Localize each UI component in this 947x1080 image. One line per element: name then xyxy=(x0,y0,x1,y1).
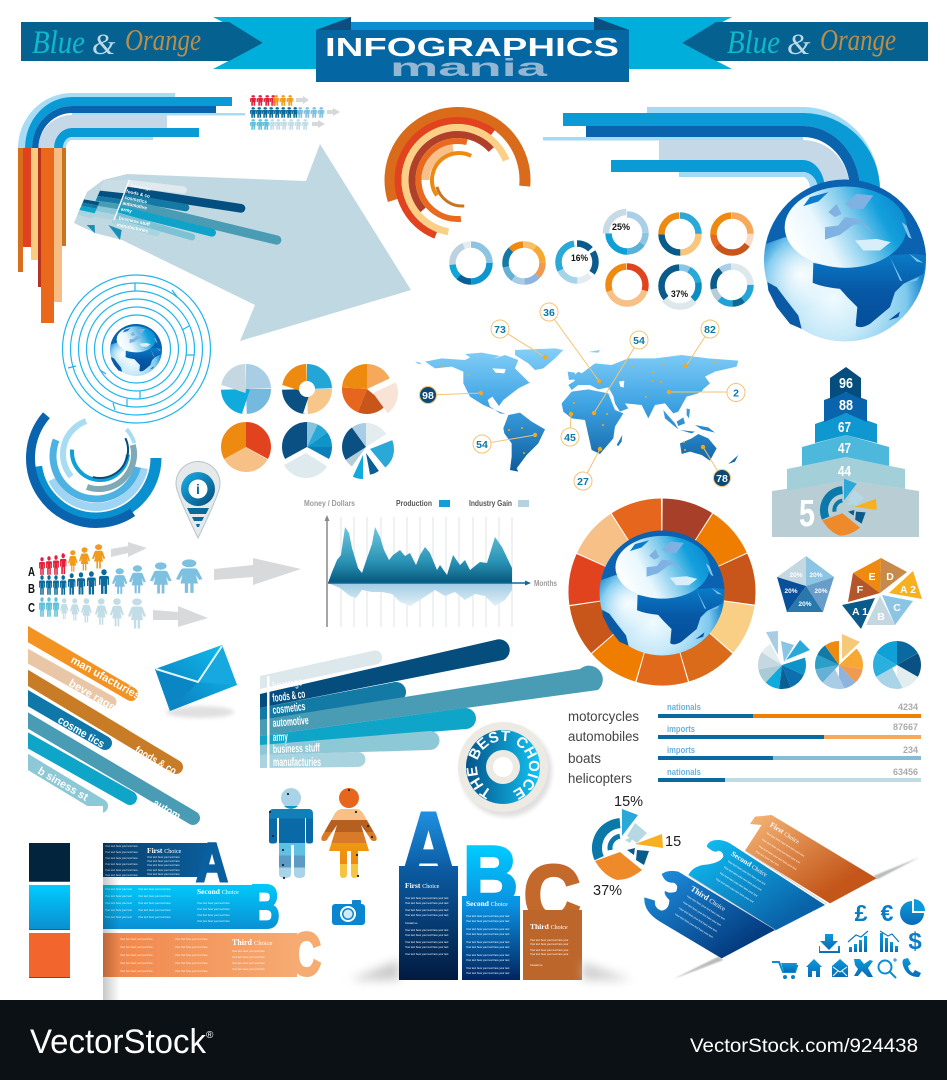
icon: cart xyxy=(772,962,797,979)
envelope icon xyxy=(155,645,237,718)
column B: Your text here your text here your text xyxy=(466,927,510,931)
horizontal tapered bars xyxy=(260,639,603,769)
big pale arrow with perspective bars xyxy=(74,144,411,341)
bar labels: army xyxy=(273,731,288,744)
male figure xyxy=(269,788,313,879)
blue arcs chart xyxy=(5,367,187,549)
column A: Your text here your text here your text xyxy=(405,908,449,912)
column B: Your text here your text here your text xyxy=(466,914,510,918)
banner C: Your text here your text here xyxy=(232,967,265,971)
ribbon 3 xyxy=(644,871,775,958)
orange vertical bars xyxy=(18,148,66,323)
top-left bent stripes xyxy=(18,93,245,323)
ribbon 1: First Choice xyxy=(768,820,802,846)
banner C: Your text here your text here xyxy=(232,961,265,965)
ribbon 1: Your text here your text xyxy=(754,849,780,867)
pie charts grid xyxy=(234,376,386,467)
diagonal bar labels: beve rage xyxy=(66,677,118,714)
diagonal bars xyxy=(28,626,200,825)
axes xyxy=(324,515,531,627)
banner B xyxy=(103,873,280,942)
map callout numbers: 27 xyxy=(577,476,589,488)
progress bar 2 xyxy=(658,722,921,739)
progress bar 3 xyxy=(658,745,921,760)
column A: Contact us xyxy=(405,921,418,925)
central title box: INFOGRAPHICS xyxy=(325,32,619,62)
bar labels: business stuff xyxy=(118,215,151,227)
column A: Your text here your text here your text xyxy=(405,933,449,937)
banner C: Your text here your text here xyxy=(120,961,153,965)
banner B: Your text here your text here xyxy=(138,908,171,912)
exploded pentagon chart: A 2 xyxy=(900,584,916,596)
diagonal bar labels xyxy=(36,654,183,823)
banner A xyxy=(103,831,228,893)
segmented pie with percentages: 15% xyxy=(614,794,643,810)
column C: Your text here your text here your xyxy=(530,942,569,946)
bar labels: beverage xyxy=(130,183,152,192)
column B: B xyxy=(463,830,518,921)
pie 4 xyxy=(234,434,258,460)
colour blocks xyxy=(29,843,70,978)
column A: Your text here your text here your text xyxy=(405,913,449,917)
donut 1 xyxy=(452,244,490,282)
icon: euro: € xyxy=(881,900,894,926)
progress bar 4: 63456 xyxy=(893,767,918,777)
right banner: Blue and Orange: Blue xyxy=(727,25,780,61)
progress bar 3: imports xyxy=(667,745,695,755)
map callout numbers: 78 xyxy=(716,473,728,485)
left banner: Blue and Orange: & xyxy=(92,28,116,61)
ribbon 3: Your text here your text here your text xyxy=(674,912,714,939)
info pin xyxy=(176,461,220,538)
column B: Your text here your text here your text xyxy=(466,953,510,957)
banner A: Your text here your text here xyxy=(105,844,138,848)
row B xyxy=(39,559,202,595)
exploded pentagon chart: E xyxy=(868,571,876,583)
best choice badge: THE BEST CHOICE xyxy=(466,730,540,800)
female figure xyxy=(321,788,377,878)
donut charts xyxy=(452,212,750,306)
banner B: Your text here your text here xyxy=(138,887,171,891)
area chart xyxy=(304,499,557,627)
chart labels: Production xyxy=(396,499,432,508)
ribbon 3: Third Choice xyxy=(689,884,728,913)
banner B: Your text here your text here xyxy=(138,915,171,919)
column B: Your text here your text here your text xyxy=(466,958,510,962)
icon: pie xyxy=(900,899,925,925)
icon: home xyxy=(806,959,822,977)
bar labels xyxy=(272,676,321,769)
bar labels: manufacturies xyxy=(116,222,149,234)
bar labels: manufacturies xyxy=(273,757,321,769)
progress bar 3: 234 xyxy=(903,745,918,755)
bar labels: cosmetics xyxy=(272,701,306,717)
banner B: Your text here your text xyxy=(105,908,132,912)
column A: Your text here your text here your text xyxy=(405,928,449,932)
banner B: Your text here your text here xyxy=(197,901,230,905)
banner B: Your text here your text xyxy=(105,901,132,905)
orange data dots xyxy=(442,355,715,454)
donut 3: 16%: 16% xyxy=(571,253,588,264)
white fold strip xyxy=(70,806,120,1000)
bar labels xyxy=(116,183,152,234)
banner A: A xyxy=(196,831,228,893)
ribbon 2: Second Choice xyxy=(730,849,770,879)
pie 2 xyxy=(294,376,320,402)
banner C: Your text here your text here xyxy=(120,953,153,957)
footer bar: VectorStock xyxy=(30,1023,207,1061)
exploded pentagon chart xyxy=(842,558,922,629)
column A xyxy=(399,793,458,980)
icon: pound: £ xyxy=(855,900,868,926)
banner A: Your text here your text here xyxy=(147,859,180,863)
banner A: Your text here your text here xyxy=(147,872,180,876)
production area xyxy=(328,527,512,583)
pie 3 xyxy=(354,376,386,406)
bottom right pies xyxy=(766,631,909,677)
map callout numbers: 82 xyxy=(704,324,716,336)
icon: rising chart xyxy=(848,931,868,952)
row A xyxy=(39,544,105,575)
map callout numbers: 36 xyxy=(543,307,555,319)
second panel stripes xyxy=(89,180,129,220)
ribbon 1: Your text here your text here your text xyxy=(761,837,801,864)
stepped pyramid xyxy=(772,367,919,537)
map callout numbers: 73 xyxy=(494,324,506,336)
progress bars xyxy=(658,702,921,782)
people pictogram rows xyxy=(28,542,301,629)
left banner: Blue and Orange: Blue xyxy=(32,25,85,61)
banner A: Your text here your text here xyxy=(147,868,180,872)
column C: Your text here your text here your xyxy=(530,938,569,942)
column C: C xyxy=(524,848,580,941)
column B: Your text here your text here your text xyxy=(466,940,510,944)
stepped pyramid: 67 xyxy=(838,419,851,436)
bar labels: automotive xyxy=(122,200,148,211)
ribbon 1 xyxy=(745,815,877,903)
banner B: Your text here your text here xyxy=(138,901,171,905)
donut 4: 25%: 25% xyxy=(612,222,631,233)
row C xyxy=(39,597,146,629)
diagonal bar labels: man ufacturies xyxy=(69,654,143,702)
floor shadows xyxy=(350,960,399,980)
icon: phone xyxy=(902,958,921,977)
map callout numbers xyxy=(420,303,745,490)
pentagon chart: 20% xyxy=(814,588,828,595)
exploded pentagon chart: D xyxy=(886,571,894,583)
grid lines xyxy=(341,517,512,627)
reflected area xyxy=(328,583,512,606)
icon: falling chart xyxy=(880,931,899,952)
stepped pyramid: 96 xyxy=(839,375,853,392)
banner A: Your text here your text here xyxy=(147,863,180,867)
pie B xyxy=(827,634,860,677)
ribbon 3: Your text here your text here your text xyxy=(678,906,718,933)
donut 8: 37%: 37% xyxy=(671,289,688,300)
pentagon chart xyxy=(777,556,834,612)
pie 5 xyxy=(294,434,320,466)
progress bar 1: nationals xyxy=(667,702,701,712)
ribbon 2 xyxy=(688,840,825,931)
row labels xyxy=(28,564,35,615)
info pin: i xyxy=(196,481,200,497)
column C: Your text here your text here your xyxy=(530,952,569,956)
pie 1 xyxy=(234,376,258,402)
banner B: Your text here your text xyxy=(105,887,132,891)
bar labels: beverage xyxy=(272,676,303,693)
perspective bars xyxy=(77,180,277,240)
banner C: Your text here your text here xyxy=(120,945,153,949)
banner C: Your text here your text here xyxy=(175,937,208,941)
ribbon 2: Your text here your text here your text xyxy=(727,859,767,886)
legend labels: helicopters xyxy=(568,771,632,786)
donut 6 xyxy=(714,216,750,252)
footer bar: ® xyxy=(206,1030,214,1041)
bar labels: army xyxy=(120,206,133,214)
chart labels: Industry Gain xyxy=(469,499,512,508)
map callout numbers: 2 xyxy=(733,388,739,400)
world map xyxy=(415,303,745,490)
bar labels: foods & co xyxy=(272,688,306,705)
icon: download xyxy=(819,934,840,953)
right bent stripes xyxy=(543,107,880,190)
left banner: Blue and Orange: Orange xyxy=(125,22,201,57)
best choice badge xyxy=(458,722,553,818)
ribbon 3: Your text here your text here your text xyxy=(682,900,722,927)
banner C xyxy=(103,921,321,988)
bar labels: automotive xyxy=(272,715,309,730)
banner C: Your text here your text here xyxy=(120,937,153,941)
column B: Your text here your text here your text xyxy=(466,971,510,975)
banner C: Your text here your text here xyxy=(232,949,265,953)
donut 4: 25% xyxy=(606,212,648,254)
banner B: Your text here your text xyxy=(105,915,132,919)
column A: Your text here your text here your text xyxy=(405,901,449,905)
diagonal bar labels: cosme tics xyxy=(56,714,107,751)
pentagon chart: 20% xyxy=(789,572,803,579)
icon: mail xyxy=(832,959,848,977)
legend labels: automobiles xyxy=(568,729,639,744)
ribbon 2: Your text here your text here your text xyxy=(719,871,759,898)
column C: Your text here your text here your xyxy=(530,948,569,952)
banner C: Your text here your text here xyxy=(175,961,208,965)
pie 6 xyxy=(351,435,382,467)
chart labels xyxy=(304,499,557,588)
banner C: Your text here your text here xyxy=(120,969,153,973)
header banner xyxy=(21,17,928,82)
column B: Your text here your text here your text xyxy=(466,945,510,949)
donut 3: 16% xyxy=(558,244,596,280)
numbered ribbons xyxy=(644,815,919,979)
pentagon chart: 20% xyxy=(784,588,798,595)
segmented pie with percentages xyxy=(589,794,681,899)
segmented pie with percentages: 37% xyxy=(593,883,622,899)
first panel stripes xyxy=(77,199,99,219)
bar labels: business stuff xyxy=(273,742,320,756)
bar labels: cosmetics xyxy=(124,195,148,204)
row labels: B xyxy=(28,581,35,596)
camera icon xyxy=(332,900,365,925)
banner B: Your text here your text here xyxy=(138,894,171,898)
banner B: Your text here your text xyxy=(105,894,132,898)
bar labels: foods & co xyxy=(126,189,151,199)
footer bar: VectorStock.com/924438 xyxy=(690,1036,918,1057)
orange ring with globe xyxy=(553,483,771,701)
small people rows top xyxy=(250,95,340,130)
banner C: Your text here your text here xyxy=(175,945,208,949)
icon: dollar: $ xyxy=(908,928,922,955)
banner C: Your text here your text here xyxy=(175,953,208,957)
right cyan ribbon xyxy=(594,17,732,69)
column B xyxy=(462,830,520,980)
fold triangles xyxy=(87,225,95,233)
progress bar 4: nationals xyxy=(667,767,701,777)
progress bar 1: 4234 xyxy=(898,702,918,712)
legend labels: boats xyxy=(568,751,601,766)
icon: search xyxy=(878,958,897,978)
left cyan ribbon xyxy=(213,17,351,69)
ribbon 2: Your text here your text here your text xyxy=(723,865,763,892)
banner B: B xyxy=(250,873,280,942)
progress bar 2: 87667 xyxy=(893,722,918,732)
stepped pyramid: 44 xyxy=(838,463,852,480)
banner A: Your text here your text here xyxy=(105,850,138,854)
right banner: Blue and Orange: Orange xyxy=(820,22,896,57)
ribbon 1: Your text here your text here your text xyxy=(765,831,805,858)
column B: Your text here your text here your text xyxy=(466,932,510,936)
central title box: mania xyxy=(390,54,549,82)
mini segmented pie xyxy=(818,479,877,536)
banner C: Your text here your text here xyxy=(175,969,208,973)
ribbon 1: Your text here your text here your text xyxy=(758,844,798,871)
banner B: Your text here your text here xyxy=(197,907,230,911)
stepped pyramid: 5 xyxy=(799,493,815,535)
footer bar xyxy=(0,1000,947,1080)
diagonal bar labels: b siness st xyxy=(36,765,90,804)
column A: Your text here your text here your text xyxy=(405,940,449,944)
banner B: Second Choice xyxy=(197,887,239,896)
column A: A xyxy=(401,793,456,898)
grey arrows xyxy=(111,542,301,627)
exploded pentagon chart: B xyxy=(877,611,885,623)
banner B: Your text here your text here xyxy=(197,913,230,917)
row labels: A xyxy=(28,564,35,579)
banner C: Third Choice xyxy=(232,938,273,947)
column B: Your text here your text here your text xyxy=(466,919,510,923)
exploded pentagon chart: C xyxy=(893,602,901,614)
map callout numbers: 54 xyxy=(476,439,488,451)
pentagon chart: 20% xyxy=(809,572,823,579)
column C: Contact us xyxy=(530,963,543,967)
banner B: Your text here your text here xyxy=(197,919,230,923)
diagonal bar labels: autom xyxy=(150,797,183,823)
concentric orange arcs xyxy=(373,95,542,265)
legend labels: motorcycles xyxy=(568,709,639,724)
donut 7 xyxy=(608,266,646,304)
progress bar 1 xyxy=(658,702,921,718)
stepped pyramid: 47 xyxy=(838,440,851,457)
banner A: Your text here your text here xyxy=(105,873,138,877)
exploded pentagon chart: F xyxy=(857,584,864,596)
banner C: C xyxy=(290,921,321,988)
ribbon shadows xyxy=(673,857,919,979)
continents xyxy=(415,348,738,472)
pie A xyxy=(766,631,810,677)
column C xyxy=(523,848,582,980)
tall ABC columns xyxy=(399,793,632,980)
column A: Your text here your text here your text xyxy=(405,952,449,956)
diagonal bar labels: arm xyxy=(110,795,131,814)
donut 8: 37% xyxy=(660,266,700,306)
legend labels xyxy=(568,709,639,786)
exploded pentagon chart: A 1 xyxy=(852,606,868,618)
ribbon 2: Your text here your text here your text xyxy=(715,877,755,904)
map callout numbers: 45 xyxy=(564,432,576,444)
column A: First Choice xyxy=(405,881,440,890)
row labels: C xyxy=(28,600,35,615)
ABC horizontal banners xyxy=(29,806,321,1000)
progress bar 2: imports xyxy=(667,724,695,734)
column B: Second Choice xyxy=(466,899,508,908)
right banner: Blue and Orange xyxy=(682,22,928,61)
column A: Your text here your text here your text xyxy=(405,896,449,900)
progress bar 4 xyxy=(658,767,921,782)
large globe xyxy=(764,180,926,341)
icon: plane xyxy=(854,959,873,977)
segmented pie with percentages: 15 xyxy=(665,834,681,850)
diagonal bar labels: foods & co xyxy=(132,744,179,778)
column A: Your text here your text here your text xyxy=(405,945,449,949)
banner A: Your text here your text here xyxy=(105,868,138,872)
banner A: Your text here your text here xyxy=(105,856,138,860)
donut 5 xyxy=(662,216,698,252)
maze rings with small globe xyxy=(62,275,210,423)
donut 9 xyxy=(714,266,750,304)
central title box xyxy=(316,17,629,82)
banner A: Your text here your text here xyxy=(147,855,180,859)
left banner: Blue and Orange xyxy=(21,22,263,61)
column C: Third Choice xyxy=(530,922,568,931)
banner A: First Choice xyxy=(147,846,182,855)
map callout numbers: 98 xyxy=(422,390,434,402)
chart labels: Money / Dollars xyxy=(304,499,355,508)
pie C xyxy=(885,653,909,677)
banner A: Your text here your text here xyxy=(105,862,138,866)
chart labels: Months xyxy=(534,579,557,588)
column B: Your text here your text here your text xyxy=(466,966,510,970)
pentagon chart: 20% xyxy=(798,601,812,608)
ribbon 3: Your text here your text here your text xyxy=(686,894,726,921)
leader lines xyxy=(428,312,736,481)
donut 2 xyxy=(506,244,542,282)
banner C: Your text here your text here xyxy=(232,955,265,959)
stepped pyramid: 88 xyxy=(839,397,853,414)
map callout numbers: 54 xyxy=(633,335,645,347)
icon set xyxy=(772,899,925,979)
right banner: Blue and Orange: & xyxy=(787,28,811,61)
